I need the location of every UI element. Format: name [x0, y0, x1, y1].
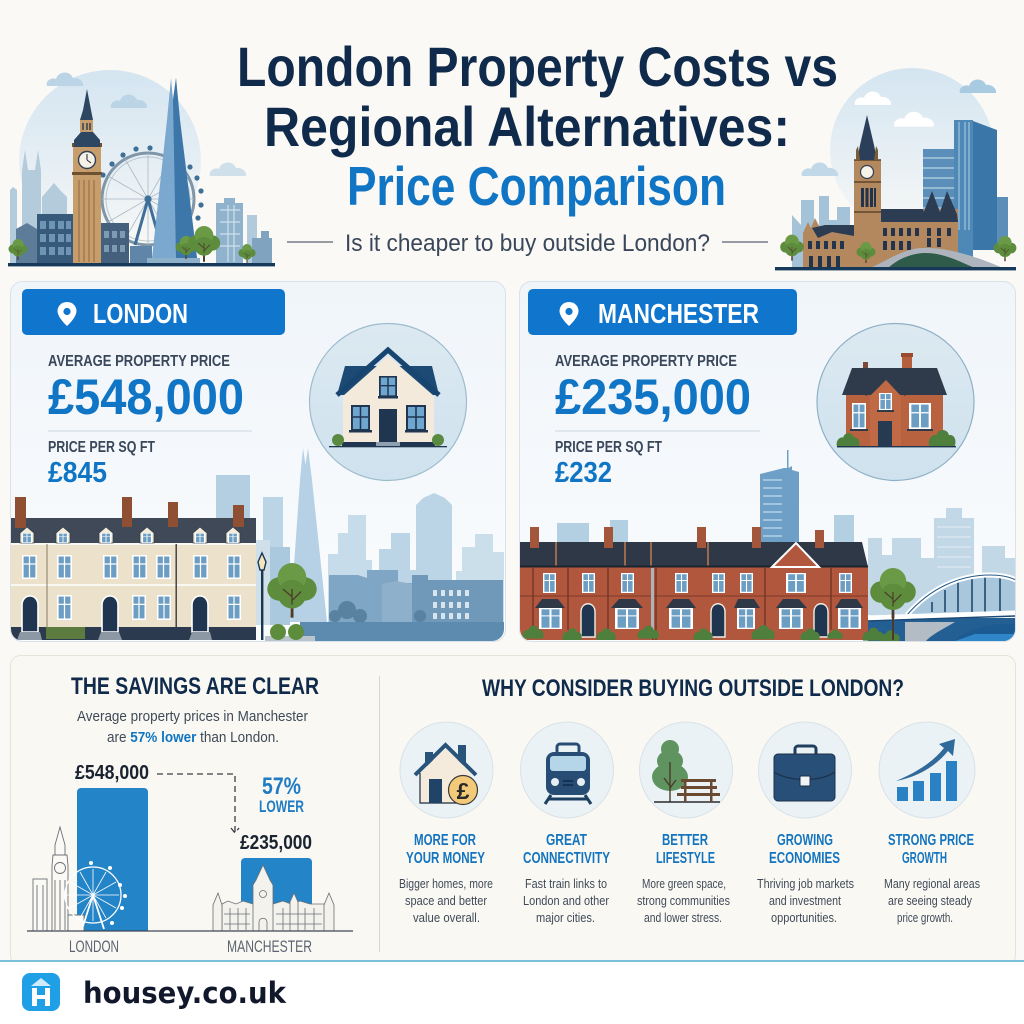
panel: Manchester: [519, 282, 1016, 642]
label: BETTER: [662, 832, 708, 849]
description: price growth.: [897, 911, 953, 925]
description: [884, 877, 980, 925]
axis labels: [69, 937, 312, 956]
title: [237, 35, 838, 217]
arrow: dashed drop: [157, 774, 239, 833]
reason: great connectivity: [520, 722, 614, 925]
label: [523, 832, 610, 867]
description: and investment: [769, 894, 841, 908]
description: Many regional areas: [884, 877, 980, 891]
London price stats: AVERAGE PROPERTY PRICE: [48, 353, 230, 370]
axis labels: LONDON: [69, 937, 119, 956]
London header badge: [22, 289, 285, 335]
label: STRONG PRICE: [888, 832, 974, 849]
icon: Manchester town hall outline: [213, 865, 334, 931]
callout: 57% lower: 57%: [262, 773, 301, 800]
terrace houses: [11, 497, 256, 640]
icon: housey logo: [22, 973, 60, 1011]
illustration: Manchester skyline: [775, 68, 1016, 270]
description: More green space,: [642, 877, 726, 891]
label: [888, 832, 974, 867]
label: CONNECTIVITY: [523, 850, 610, 867]
Manchester price stats: [555, 353, 760, 489]
label: ECONOMIES: [769, 850, 840, 867]
description: are seeing steady: [888, 894, 973, 908]
description: Thriving job markets: [757, 877, 854, 891]
description: space and better: [405, 894, 487, 908]
reason: more for your money: [399, 722, 493, 925]
savings heading and text: THE SAVINGS ARE CLEAR: [71, 673, 319, 700]
description: [637, 877, 730, 925]
icon: house and pound coin: £: [457, 778, 470, 804]
London house roundel: [310, 324, 466, 480]
description: opportunities.: [771, 911, 837, 925]
Manchester street scene: [519, 450, 1016, 642]
panel: savings and reasons: [10, 656, 1016, 966]
brand name: housey.co.uk: [83, 976, 287, 1010]
street lamp and tree: [258, 553, 317, 641]
label: YOUR MONEY: [406, 850, 485, 867]
icon: house and pound coin: [400, 722, 493, 818]
description: [399, 877, 493, 925]
icon: rising bar chart: [879, 722, 975, 818]
London bar: £548,000: [75, 762, 149, 784]
description: Bigger homes, more: [399, 877, 493, 891]
callout: 57% lower: [259, 773, 304, 816]
label: GREAT: [546, 832, 587, 849]
savings heading and text: Average property prices in Manchester: [77, 708, 308, 725]
description: [523, 877, 609, 925]
icon: train: [520, 722, 614, 818]
label: LIFESTYLE: [656, 850, 715, 867]
description: [757, 877, 854, 925]
panel: London: [10, 282, 506, 642]
London price stats: PRICE PER SQ FT: [48, 439, 155, 456]
icon: briefcase: [758, 722, 852, 818]
label: GROWING: [777, 832, 833, 849]
Manchester bar: [240, 832, 312, 931]
bar chart: price comparison: [27, 762, 353, 956]
London bar: [75, 762, 149, 931]
Manchester header badge: MANCHESTER: [598, 298, 759, 329]
icon: London landmarks outline: [33, 827, 127, 931]
axis labels: MANCHESTER: [227, 937, 312, 956]
reason: better lifestyle: [637, 722, 732, 925]
reason: strong price growth: [879, 722, 980, 925]
London price stats: £845: [48, 457, 107, 489]
description: London and other: [523, 894, 609, 908]
description: and lower stress.: [644, 911, 722, 925]
illustration: London skyline: [8, 70, 275, 266]
description: strong communities: [637, 894, 730, 908]
subtitle: Is it cheaper to buy outside London?: [345, 230, 710, 257]
London price stats: [48, 353, 252, 489]
title: London Property Costs vs: [237, 35, 838, 98]
description: major cities.: [536, 911, 595, 925]
Manchester house roundel: [817, 324, 974, 480]
tree and bridge: [863, 568, 1016, 642]
callout: 57% lower: LOWER: [259, 797, 304, 816]
axis line: [27, 930, 353, 932]
label: [406, 832, 485, 867]
terrace houses: [519, 527, 868, 640]
description: Fast train links to: [525, 877, 607, 891]
label: GROWTH: [902, 850, 947, 867]
Manchester bar: £235,000: [240, 832, 312, 854]
distant skyline: [557, 450, 1015, 618]
heading: why consider buying outside London: WHY CONSIDER BUYING OUTSIDE LONDON?: [482, 675, 904, 702]
Manchester price stats: AVERAGE PROPERTY PRICE: [555, 353, 737, 370]
London header badge: LONDON: [93, 298, 188, 329]
Manchester price stats: £232: [555, 457, 612, 489]
description: value overall.: [413, 911, 480, 925]
label: [656, 832, 715, 867]
London price stats: £548,000: [48, 369, 244, 425]
Manchester header badge: [528, 289, 797, 335]
reason: growing economies: [757, 722, 854, 925]
savings heading and text: are 57% lower than London.: [107, 729, 279, 746]
label: [769, 832, 840, 867]
savings heading and text: [71, 673, 319, 746]
footer: [0, 960, 1024, 1024]
title: Price Comparison: [347, 155, 726, 217]
distant skyline: [216, 448, 505, 642]
London street scene: [11, 448, 505, 642]
Manchester price stats: £235,000: [555, 369, 751, 425]
label: MORE FOR: [414, 832, 476, 849]
icon: tree and bench: [640, 722, 732, 818]
title: Regional Alternatives:: [264, 95, 790, 158]
Manchester price stats: PRICE PER SQ FT: [555, 439, 662, 456]
